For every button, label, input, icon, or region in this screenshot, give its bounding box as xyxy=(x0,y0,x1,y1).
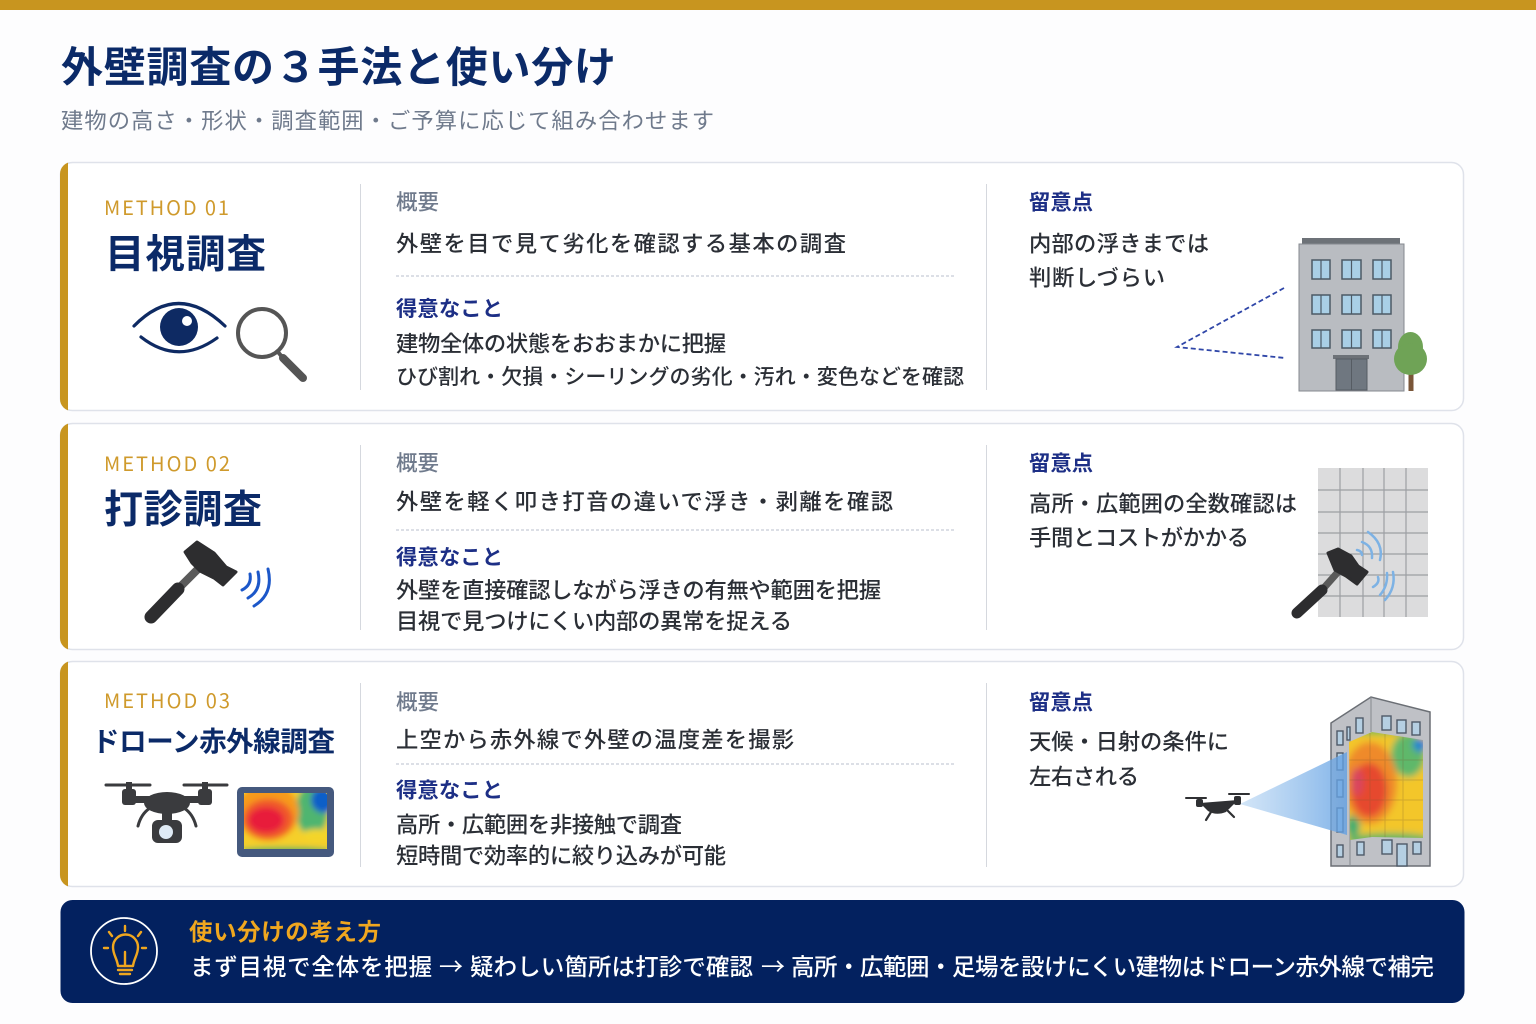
caution text: 手間とコストがかかる xyxy=(1029,520,1249,552)
method label 02: METHOD 02 xyxy=(104,448,230,477)
sight lines xyxy=(1177,288,1285,358)
caution text: 高所・広範囲の全数確認は xyxy=(1029,486,1297,518)
illustration: building with thermal overlay xyxy=(1331,697,1435,866)
overview text: 外壁を目で見て劣化を確認する基本の調査 xyxy=(396,226,846,258)
icon: sound waves xyxy=(242,569,269,606)
icon: hammer xyxy=(151,542,236,617)
strengths text xyxy=(396,540,881,636)
title: 外壁調査の３手法と使い分け xyxy=(61,34,616,95)
illustration: tree xyxy=(1394,332,1427,391)
top accent bar xyxy=(0,0,1536,10)
strengths text xyxy=(396,292,964,391)
caution text xyxy=(1029,446,1297,552)
caution text: 内部の浮きまでは xyxy=(1029,226,1209,258)
overview text: 概要 xyxy=(396,446,439,478)
strengths text xyxy=(396,774,726,870)
overview text xyxy=(396,446,893,516)
caution text xyxy=(1029,186,1209,292)
heading: hammering test: 打診調査 xyxy=(104,479,262,535)
summary text: 疑わしい箇所は打診で確認 xyxy=(470,948,753,982)
illustration: hammer on wall xyxy=(1297,549,1367,613)
strengths text: 建物全体の状態をおおまかに把握 xyxy=(396,326,726,358)
summary text xyxy=(190,947,1434,982)
summary text: → xyxy=(761,947,785,982)
illustration: tiled wall xyxy=(1318,468,1428,617)
panel: method 03 drone infrared xyxy=(60,661,1464,887)
strengths text: 高所・広範囲を非接触で調査 xyxy=(396,808,682,840)
strengths text: 得意なこと xyxy=(396,292,503,323)
strengths text: 外壁を直接確認しながら浮きの有無や範囲を把握 xyxy=(396,573,881,605)
summary heading: 使い分けの考え方 xyxy=(189,913,381,947)
strengths text: 目視で見つけにくい内部の異常を捉える xyxy=(396,604,792,636)
method label 03: METHOD 03 xyxy=(104,685,230,714)
icon: tablet thermal image xyxy=(237,787,334,857)
illustration: building xyxy=(1299,238,1404,391)
heading: drone infrared: ドローン赤外線調査 xyxy=(92,719,335,759)
infrared beam xyxy=(1240,752,1347,835)
icon: eye xyxy=(134,304,225,352)
caution text: 留意点 xyxy=(1029,186,1093,216)
overview text: 上空から赤外線で外壁の温度差を撮影 xyxy=(396,722,794,754)
panel: method 01 visual inspection xyxy=(60,162,1464,411)
caution text: 留意点 xyxy=(1029,446,1093,478)
subtitle: 建物の高さ・形状・調査範囲・ご予算に応じて組み合わせます xyxy=(61,104,714,136)
caution text: 留意点 xyxy=(1029,686,1093,716)
strengths text: 得意なこと xyxy=(396,540,503,572)
method label 01: METHOD 01 xyxy=(104,192,229,221)
strengths text: 短時間で効率的に絞り込みが可能 xyxy=(396,838,726,870)
icon: lightbulb xyxy=(91,918,157,984)
panel: method 02 hammering test xyxy=(60,423,1464,650)
caution text: 判断しづらい xyxy=(1029,260,1165,292)
caution text: 左右される xyxy=(1029,760,1139,792)
summary text: まず目視で全体を把握 xyxy=(190,948,432,982)
panel: how to choose summary xyxy=(60,900,1464,1003)
illustration: blue sound waves xyxy=(1357,532,1394,600)
illustration: small drone xyxy=(1186,794,1249,820)
caution text: 天候・日射の条件に xyxy=(1029,724,1229,756)
heading: visual inspection: 目視調査 xyxy=(105,223,266,280)
strengths text: ひび割れ・欠損・シーリングの劣化・汚れ・変色などを確認 xyxy=(396,361,964,391)
strengths text: 得意なこと xyxy=(396,774,503,804)
overview text: 概要 xyxy=(396,186,439,216)
icon: magnifier xyxy=(238,309,303,378)
overview text xyxy=(396,686,794,754)
caution text xyxy=(1029,686,1229,792)
overview text: 概要 xyxy=(396,686,439,716)
summary text: 高所・広範囲・足場を設けにくい建物はドローン赤外線で補完 xyxy=(791,948,1434,982)
summary text: → xyxy=(439,947,463,982)
icon: drone xyxy=(106,782,227,843)
overview text: 外壁を軽く叩き打音の違いで浮き・剥離を確認 xyxy=(396,484,893,516)
overview text xyxy=(396,186,846,258)
